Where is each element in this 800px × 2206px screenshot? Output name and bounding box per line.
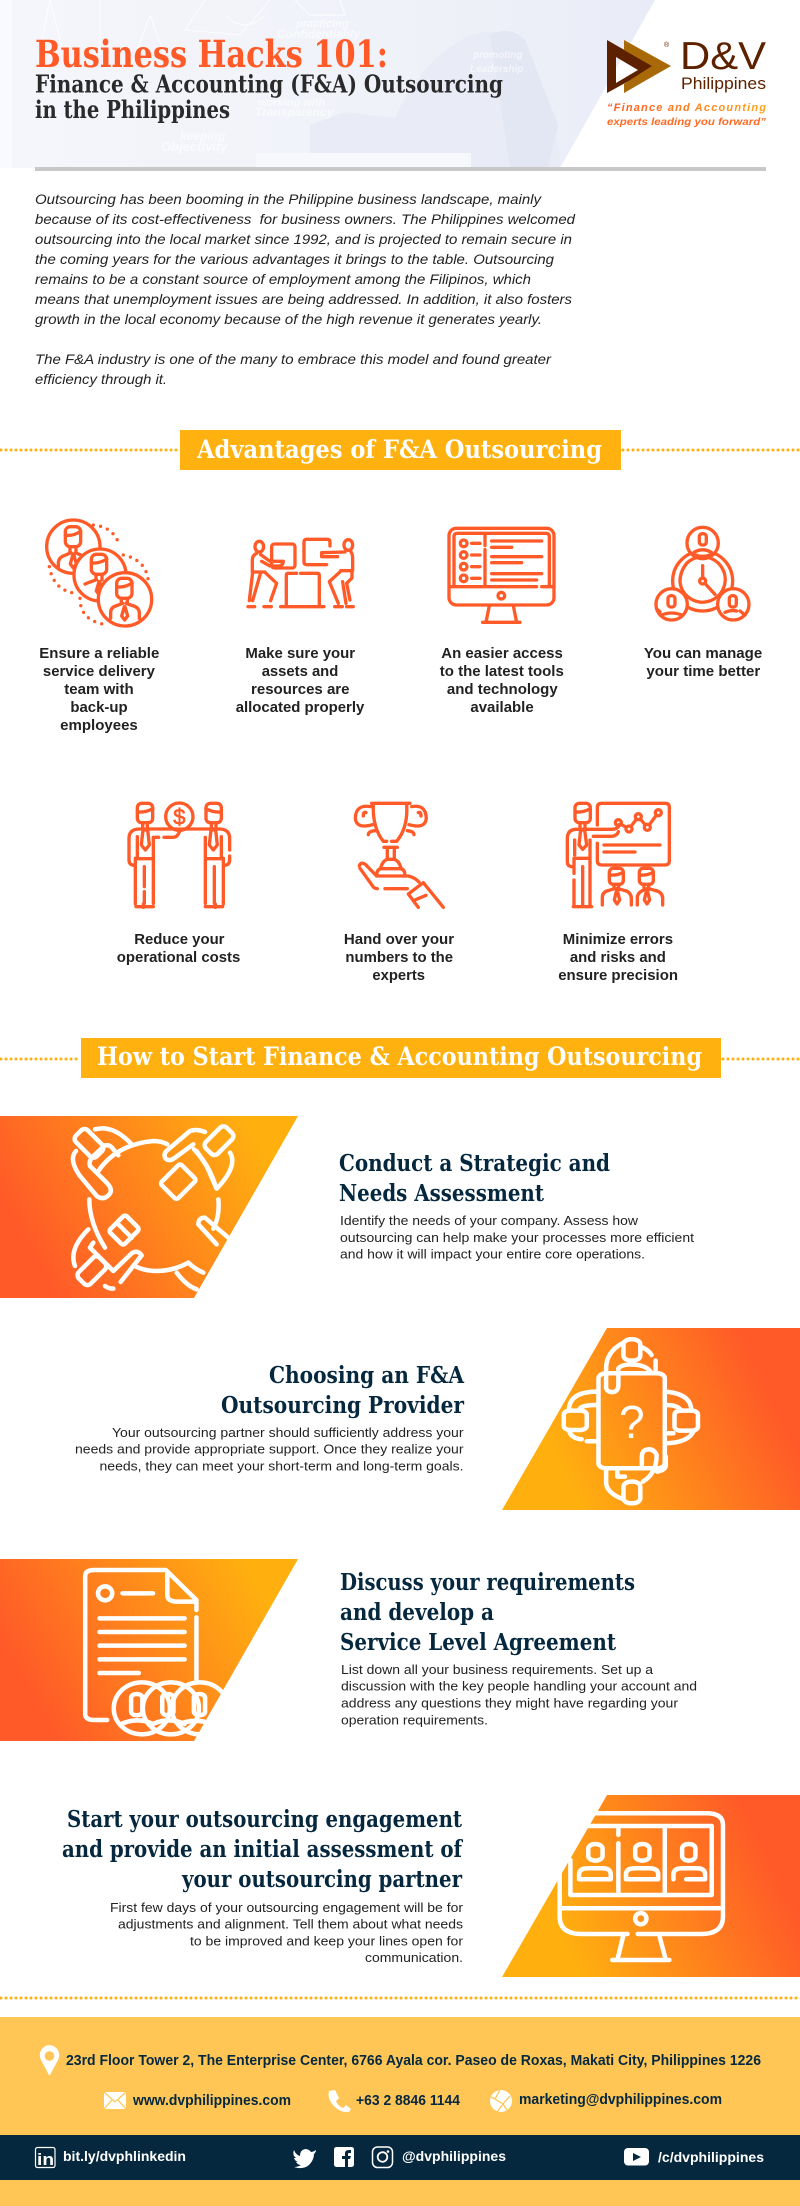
label: experts bbox=[344, 931, 454, 984]
icon: twitter bbox=[293, 2149, 316, 2168]
heading bbox=[339, 1149, 610, 1207]
header background: Objectivity bbox=[161, 139, 228, 154]
logo: “Finance and Accounting bbox=[607, 102, 766, 114]
icon: hands around question card bbox=[564, 1339, 698, 1503]
icon: location pin bbox=[40, 2045, 59, 2076]
description: Your outsourcing partner should sufficiently address your bbox=[112, 1425, 464, 1440]
intro text: remains to be a constant source of employment among the Filipinos, which bbox=[35, 271, 531, 287]
panel: step 4 outsourcing engagement bbox=[62, 1795, 800, 1977]
header background: promoting bbox=[472, 50, 522, 61]
heading: and provide an initial assessment of bbox=[62, 1835, 464, 1863]
heading: Needs Assessment bbox=[339, 1179, 544, 1207]
panel: step 1 needs assessment bbox=[0, 1116, 694, 1298]
label: tools and technology: available bbox=[470, 699, 534, 716]
intro text: means that unemployment issues are being addressed. In addition, it also fosters bbox=[35, 291, 572, 307]
label: service team: Ensure a reliable bbox=[39, 645, 159, 662]
label: operational costs: Reduce your bbox=[134, 931, 225, 948]
label: experts: experts bbox=[372, 967, 425, 984]
heading bbox=[221, 1361, 465, 1419]
description: adjustments and alignment. Tell them about what needs bbox=[118, 1916, 464, 1932]
icon: globe bbox=[490, 2090, 512, 2112]
heading bbox=[62, 1805, 464, 1893]
intro text: growth in the local economy because of the high revenue it generates yearly. bbox=[35, 311, 542, 327]
heading: Outsourcing Provider bbox=[221, 1391, 465, 1419]
icon: clock and people bbox=[656, 527, 749, 620]
email: marketing@dvphilippines.com bbox=[519, 2092, 722, 2108]
label: experts: Hand over your bbox=[344, 931, 454, 948]
description bbox=[110, 1900, 464, 1965]
title: Business Hacks 101: bbox=[35, 32, 388, 76]
description bbox=[341, 1662, 697, 1728]
label: operational costs: operational costs bbox=[117, 949, 240, 966]
social media bar bbox=[0, 2135, 800, 2180]
logo: ® bbox=[664, 41, 670, 49]
icon: hands around table bbox=[73, 1124, 235, 1289]
header background: practicing bbox=[295, 18, 349, 30]
title: Finance & Accounting (F&A) Outsourcing bbox=[35, 70, 503, 98]
intro text: outsourcing into the local market since 1992, and is projected to remain secure in bbox=[35, 231, 572, 247]
description: Identify the needs of your company. Assess how bbox=[340, 1213, 639, 1228]
intro text: Outsourcing has been booming in the Philippine business landscape, mainly bbox=[35, 191, 542, 207]
label: errors and risks bbox=[558, 931, 678, 984]
description: List down all your business requirements. Set up a bbox=[341, 1662, 654, 1677]
logo bbox=[607, 35, 767, 128]
label: manage time: your time better bbox=[646, 663, 760, 680]
icon: document with people bbox=[85, 1570, 228, 1734]
label: tools and technology: An easier access bbox=[441, 645, 563, 662]
label: service team: service delivery bbox=[43, 663, 156, 680]
label: tools and technology: to the latest tools bbox=[440, 663, 564, 680]
header background: Transparency bbox=[255, 105, 335, 119]
intro text: The F&A industry is one of the many to embrace this model and found greater bbox=[35, 351, 552, 367]
logo: Philippines bbox=[681, 75, 766, 93]
footer contact panel bbox=[0, 2017, 800, 2206]
icon: monitor with tools bbox=[449, 528, 554, 622]
heading: and develop a bbox=[340, 1598, 494, 1626]
label: manage time bbox=[644, 645, 762, 680]
address: 23rd Floor Tower 2, The Enterprise Center, 6766 Ayala cor. Paseo de Roxas, Makati City, Philippines 1226 bbox=[66, 2053, 761, 2069]
label: tools and technology bbox=[440, 645, 564, 716]
heading: Service Level Agreement bbox=[340, 1628, 616, 1656]
icon: moving assets bbox=[248, 539, 353, 607]
description: communication. bbox=[365, 1950, 463, 1965]
panel: step 2 choosing a provider bbox=[75, 1328, 800, 1510]
heading: Choosing an F&A bbox=[269, 1361, 465, 1389]
description: operation requirements. bbox=[341, 1712, 488, 1728]
title: in the Philippines bbox=[35, 95, 230, 124]
description: to be improved and keep your lines open for bbox=[190, 1934, 464, 1948]
label: tools and technology: and technology bbox=[447, 681, 558, 698]
label: experts: numbers to the bbox=[345, 949, 453, 966]
icon: cost handshake: $ bbox=[173, 804, 185, 829]
panel: step 3 service level agreement bbox=[0, 1559, 697, 1741]
label: assets and resources: Make sure your bbox=[245, 645, 355, 662]
description: discussion with the key people handling your account and bbox=[341, 1678, 697, 1694]
description bbox=[75, 1425, 464, 1474]
heading: Start your outsourcing engagement bbox=[67, 1805, 462, 1833]
question mark: ? bbox=[619, 1396, 645, 1448]
logo: experts leading you forward” bbox=[607, 116, 767, 128]
label: assets and resources: assets and bbox=[262, 663, 338, 680]
header background bbox=[0, 0, 655, 168]
icon: facebook bbox=[334, 2147, 354, 2167]
heading bbox=[340, 1568, 635, 1656]
label: errors and risks: Minimize errors bbox=[563, 931, 673, 948]
youtube channel: /c/dvphilippines bbox=[658, 2149, 764, 2165]
label: operational costs bbox=[117, 931, 240, 966]
linkedin url: bit.ly/dvphlinkedin bbox=[63, 2148, 186, 2164]
description: and how it will impact your entire core operations. bbox=[340, 1246, 645, 1262]
header background: Leadership bbox=[470, 64, 523, 75]
description: address any questions they might have regarding your bbox=[341, 1696, 679, 1710]
header background: working with bbox=[258, 97, 326, 109]
label: manage time: You can manage bbox=[644, 645, 762, 662]
icon: linkedin: in bbox=[37, 2150, 54, 2169]
icon: monitor with three people bbox=[560, 1813, 723, 1960]
label: service team: team with bbox=[64, 681, 134, 698]
gradient shape 1 bbox=[0, 1116, 298, 1298]
header background: keeping bbox=[180, 129, 226, 143]
heading: Conduct a Strategic and bbox=[339, 1149, 610, 1177]
label: assets and resources: allocated properly bbox=[236, 699, 365, 716]
intro text: the coming years for the various advantages it brings to the table. Outsourcing bbox=[35, 251, 554, 267]
icon: cost handshake bbox=[129, 803, 230, 907]
banner: advantages bbox=[180, 430, 621, 470]
label: service team: back-up bbox=[70, 699, 128, 716]
icon: trophy in hand bbox=[355, 803, 443, 907]
logo: D&V bbox=[680, 35, 766, 78]
label: errors and risks: and risks and bbox=[570, 949, 666, 966]
icon: youtube bbox=[624, 2148, 649, 2166]
label: assets and resources: resources are bbox=[251, 681, 350, 698]
description: needs and provide appropriate support. Once they realize your bbox=[75, 1442, 464, 1456]
description: First few days of your outsourcing engagement will be for bbox=[110, 1900, 464, 1915]
label: service team: employees bbox=[60, 717, 138, 734]
intro text: efficiency through it. bbox=[35, 371, 167, 387]
icon: presenter and audience bbox=[567, 803, 669, 907]
icon: envelope bbox=[104, 2092, 126, 2109]
website: www.dvphilippines.com bbox=[132, 2093, 291, 2109]
gradient shape 2 bbox=[502, 1328, 800, 1510]
header background: Confidentiality bbox=[277, 27, 362, 41]
phone number: +63 2 8846 1144 bbox=[356, 2093, 460, 2109]
intro text bbox=[35, 191, 576, 387]
gradient shape 3 bbox=[0, 1559, 298, 1741]
gradient shape 4 bbox=[502, 1795, 800, 1977]
icon: phone bbox=[328, 2090, 351, 2112]
icon: team of employees bbox=[47, 520, 152, 626]
banner: how to start: How to Start Finance & Accounting Outsourcing bbox=[97, 1042, 702, 1071]
title bbox=[35, 32, 503, 124]
social handle: @dvphilippines bbox=[402, 2148, 506, 2164]
heading: your outsourcing partner bbox=[181, 1865, 463, 1893]
description bbox=[340, 1213, 694, 1262]
description: outsourcing can help make your processes more efficient bbox=[340, 1230, 694, 1245]
label: errors and risks: ensure precision bbox=[558, 967, 678, 984]
intro text: because of its cost-effectiveness for business owners. The Philippines welcomed bbox=[35, 211, 576, 227]
label: assets and resources bbox=[236, 645, 365, 716]
banner: advantages: Advantages of F&A Outsourcing bbox=[196, 435, 602, 464]
label: service team bbox=[39, 645, 159, 734]
icon: linkedin bbox=[36, 2148, 55, 2169]
description: needs, they can meet your short-term and long-term goals. bbox=[100, 1458, 464, 1474]
heading: Discuss your requirements bbox=[340, 1568, 635, 1596]
banner: how to start bbox=[81, 1038, 721, 1078]
icon: instagram bbox=[372, 2147, 392, 2168]
